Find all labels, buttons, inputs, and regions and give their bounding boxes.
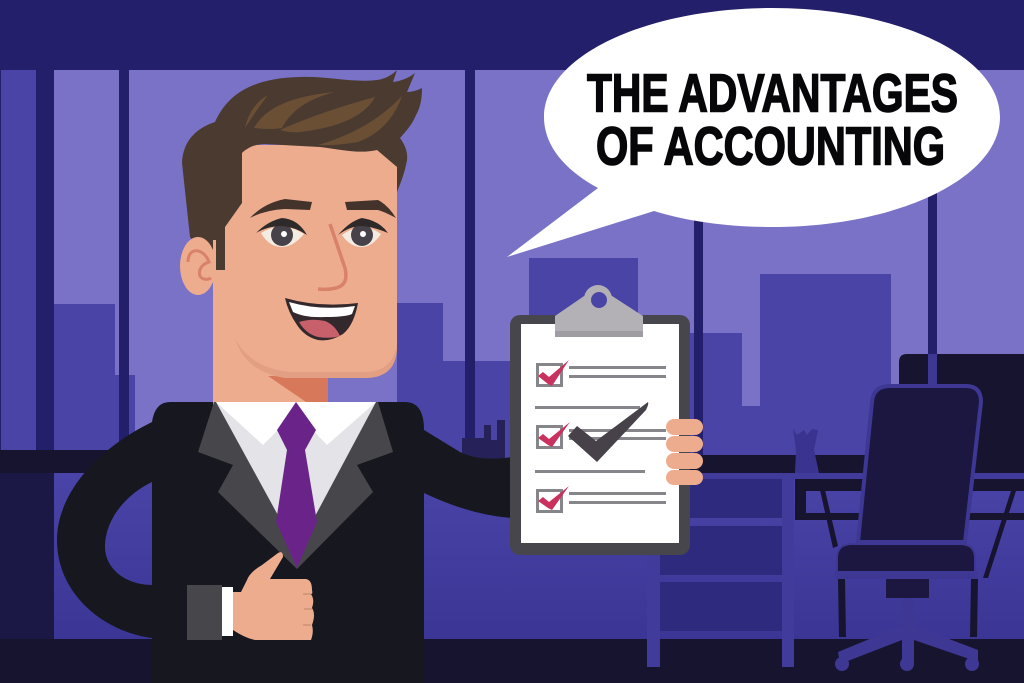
right eye [338,218,388,247]
bubble shape [507,8,1000,257]
seat mechanism [886,579,929,598]
desk top [654,473,1024,479]
chair uprights [838,579,978,637]
checkbox 1 [538,360,569,386]
desk pen cup [793,429,819,473]
neck shadow [268,376,328,402]
collar [216,402,376,445]
checkbox 2 [538,422,570,448]
tie [276,402,317,568]
window mullions [0,70,937,480]
hair [182,70,422,270]
shirt [216,402,376,550]
face [213,145,397,377]
checklist lines [535,366,666,504]
thumbs-up hand [187,552,314,640]
chair back [858,386,981,542]
fist and thumb [233,552,314,640]
jaw shading [235,338,397,378]
chair stem and star base [838,598,978,664]
chair casters [835,657,979,671]
drawer fronts [660,479,782,631]
right eyebrow [345,200,396,218]
left dark column [0,450,54,645]
window sill [0,450,135,473]
speech bubble [507,8,1000,257]
left eyebrow [250,199,312,218]
jacket cuff [187,585,222,640]
hair highlights [245,92,402,145]
shirt cuff [222,587,233,636]
mullion in front of monitor [928,354,937,386]
metal clip [555,285,643,337]
paper [521,324,679,543]
lapels [198,402,393,569]
clipboard board [510,315,690,555]
desk legs [647,555,660,667]
desk struts [820,490,1016,578]
large check mark [568,402,648,462]
ear [180,237,216,295]
city skyline [54,258,891,476]
mouth [285,298,358,340]
checkbox 3 [538,486,569,512]
left eye [256,218,307,247]
lower wall [54,473,1024,640]
neck [213,330,328,405]
suit body and arms [57,402,512,683]
finger lines [303,594,312,625]
under-desk bar [795,479,1024,520]
clipboard [510,285,703,555]
left window panel [1,70,36,450]
desk back band [640,455,1024,473]
nose [318,224,346,289]
seat base [835,571,978,579]
man [57,70,512,683]
office chair [835,386,981,671]
top ceiling band [0,0,1024,70]
desk [640,429,1024,667]
holding fingers [666,419,703,485]
chair seat [837,544,975,572]
computer monitor [899,354,1024,460]
floor [0,639,1024,683]
desk silhouettes behind arm [462,420,505,475]
